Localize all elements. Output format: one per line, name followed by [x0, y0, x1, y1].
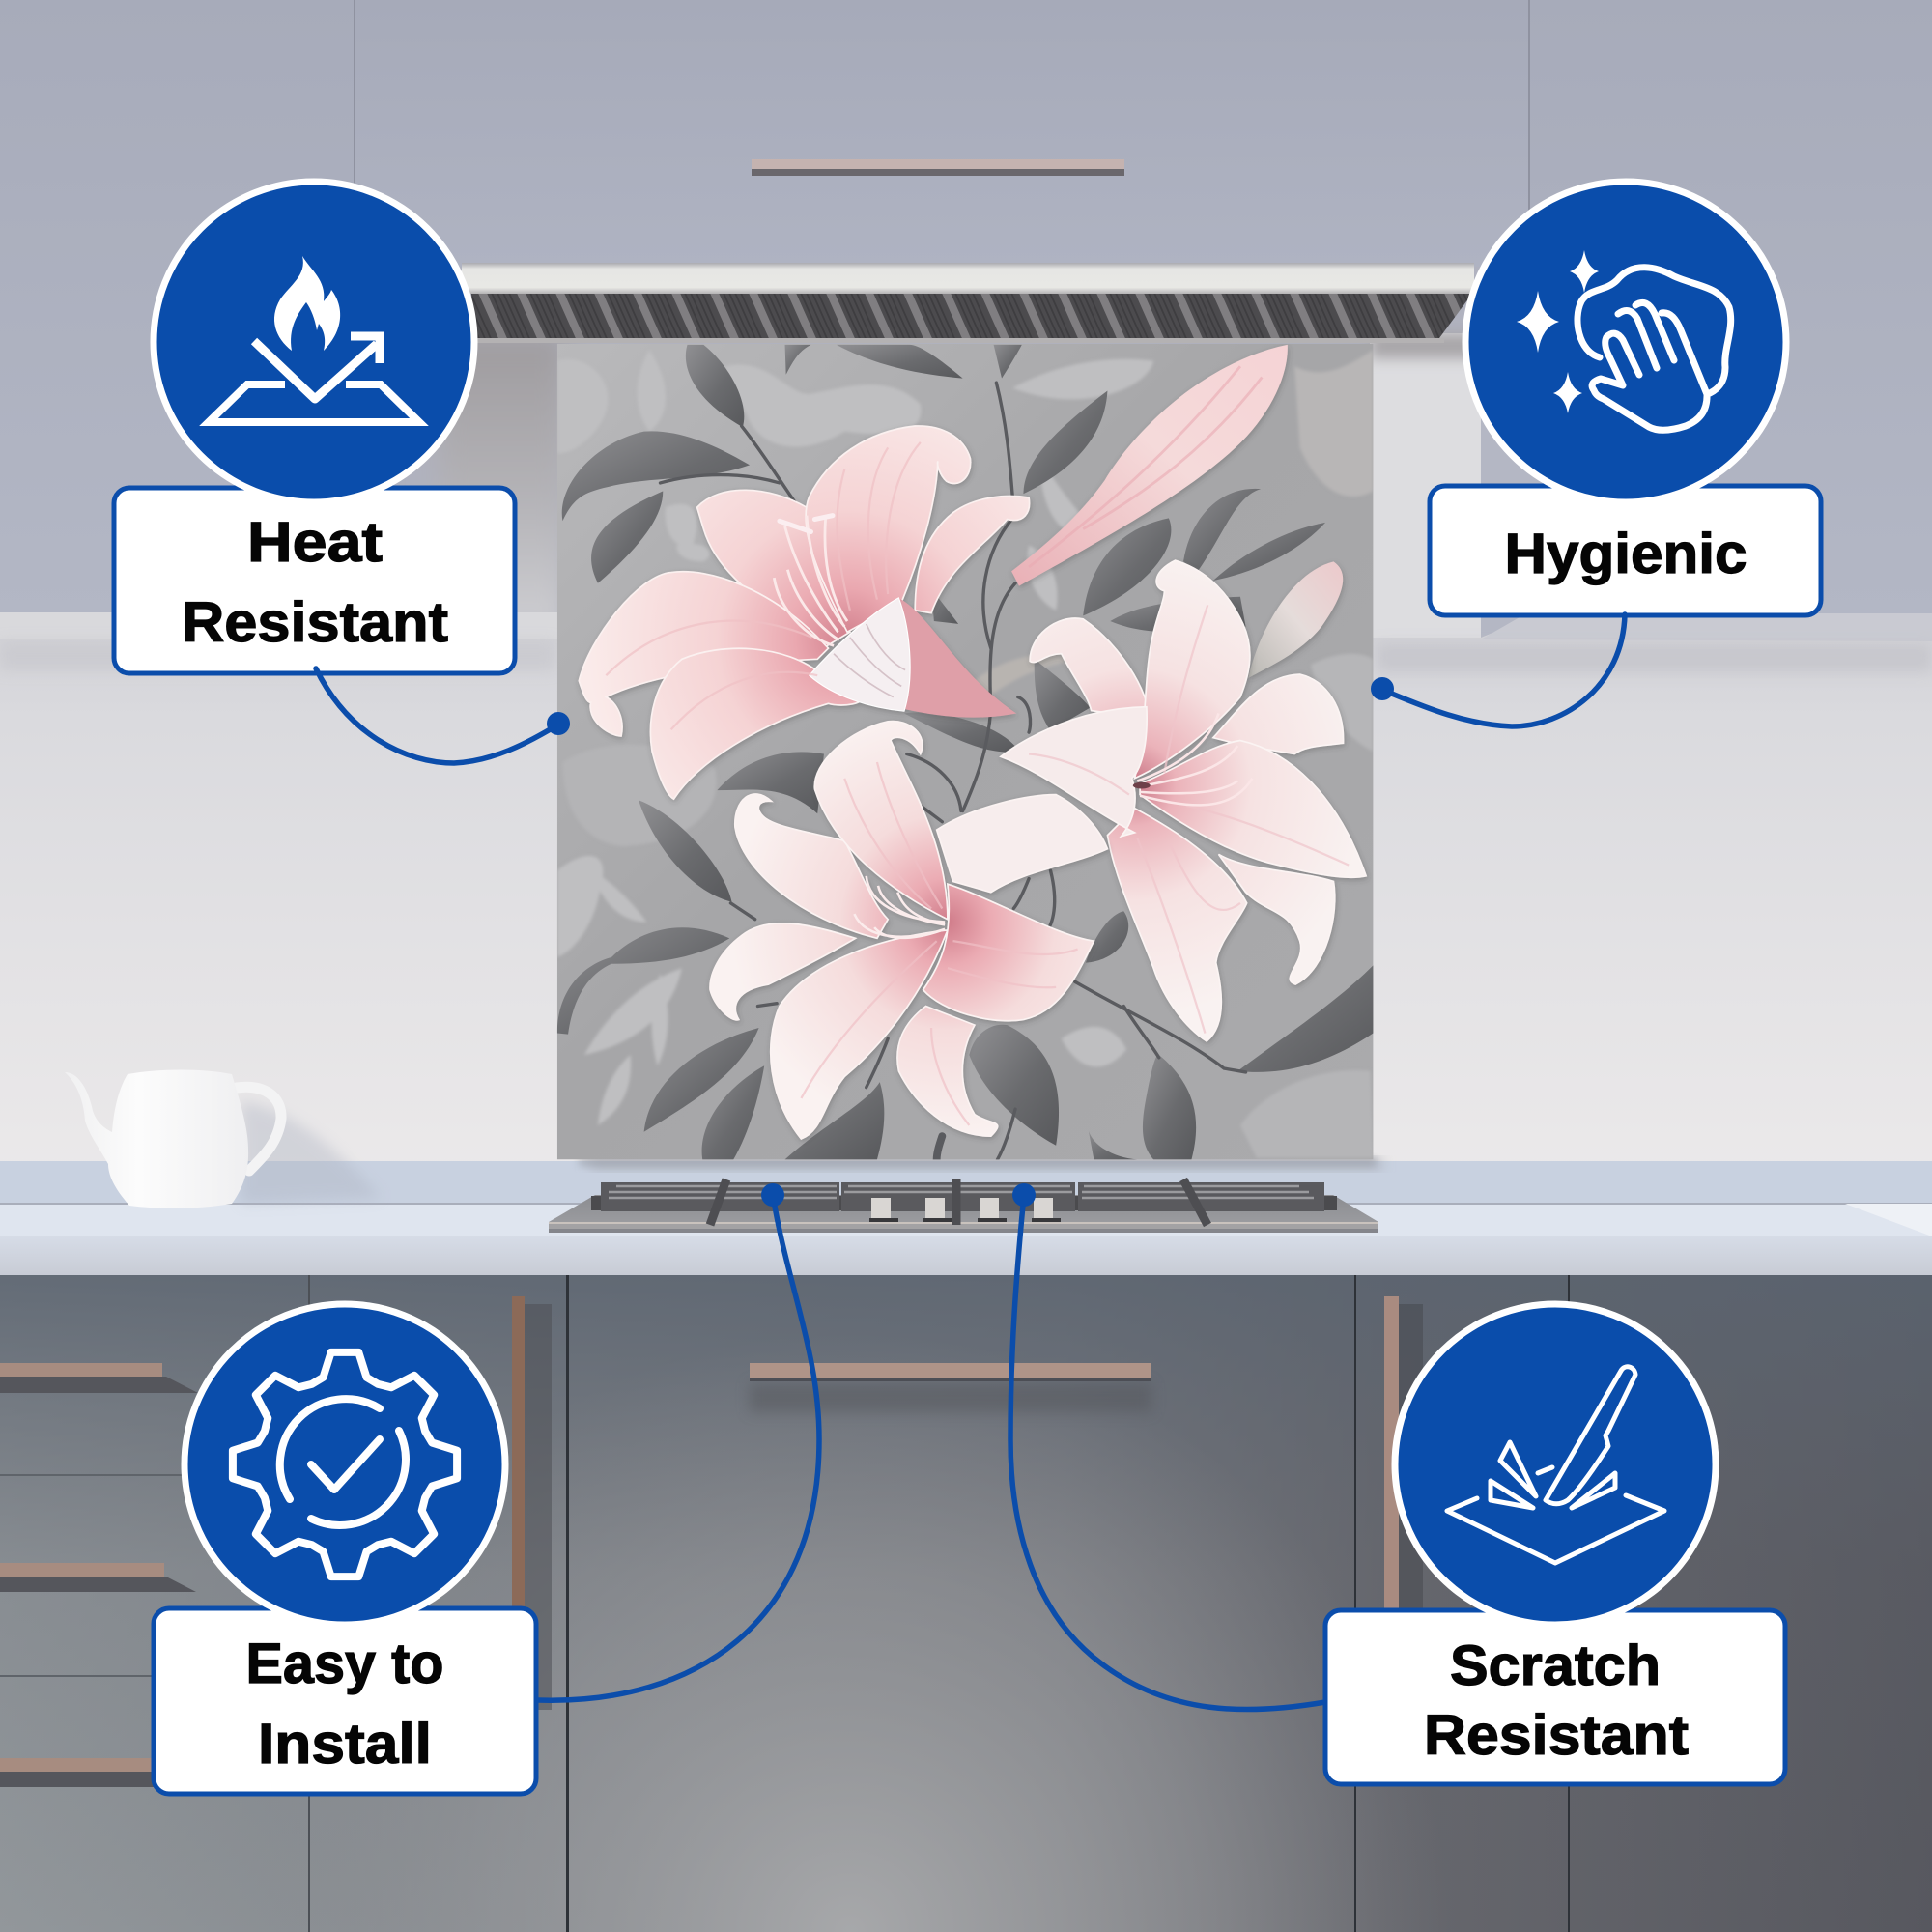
callout: Heat Resistant: [114, 182, 570, 763]
big lily bud: [1011, 345, 1288, 586]
jug shadow: [242, 1101, 367, 1200]
callout: Heat Resistant: Resistant: [182, 591, 448, 654]
icon: flame over arrow: [209, 256, 419, 422]
splashback panel: lily artwork: [557, 344, 1376, 1165]
panel background: [557, 344, 1373, 1159]
cabinet handles: [0, 1296, 1423, 1787]
panel shadow: [579, 1158, 1376, 1165]
lily flower right: [1001, 560, 1366, 1041]
label box: [1325, 1610, 1785, 1784]
icon: knife scratching surface: [1447, 1367, 1664, 1563]
anchor dot: [547, 712, 570, 735]
anchor dot: [761, 1183, 784, 1207]
stamens: [1137, 713, 1252, 805]
under-cabinet ledges: [0, 612, 1932, 672]
lily flower upper-left: [579, 426, 1030, 799]
wall: [0, 604, 1932, 1174]
label text: Scratch: [1450, 1634, 1661, 1697]
badge circle: [185, 1304, 505, 1625]
icon: gear with check: [233, 1352, 457, 1577]
control knobs: [869, 1198, 1061, 1221]
upper cabinets: [0, 0, 1932, 638]
anchor dot: [1371, 677, 1394, 700]
lower cabinets: [0, 1275, 1932, 1932]
connector line: [316, 668, 558, 763]
label box: [114, 488, 515, 673]
label text: Easy to: [245, 1633, 444, 1695]
jug: [65, 1070, 382, 1208]
callout: Scratch Resistant: [1010, 1183, 1785, 1784]
lily flower lower: [710, 722, 1107, 1139]
label box: [1430, 486, 1821, 615]
cooktop: [549, 1179, 1378, 1233]
label text: Hygienic: [1505, 523, 1747, 585]
label box: [154, 1608, 536, 1794]
connector line: [1010, 1195, 1325, 1710]
badge circle: [1395, 1304, 1716, 1625]
callout: Scratch Resistant: Resistant: [1424, 1704, 1689, 1767]
connector line: [1382, 614, 1625, 726]
extractor hood: [462, 263, 1474, 343]
badge circle: [1465, 182, 1786, 502]
pale background leaves: [557, 350, 1373, 1158]
callout: Easy to Install: [154, 1183, 819, 1794]
connector line: [538, 1195, 819, 1700]
stamens: [774, 516, 847, 645]
worktop: [0, 1160, 1932, 1275]
steel plate: [549, 1195, 1378, 1222]
stems: [660, 383, 1246, 1159]
anchor dot: [1012, 1183, 1036, 1207]
burner grates: [601, 1179, 1324, 1225]
dark leaves: [557, 345, 1373, 1159]
callout: Hygienic: [1371, 182, 1821, 726]
badge circle: [154, 182, 474, 502]
stamens: [854, 876, 945, 938]
callout: Easy to Install: Install: [258, 1713, 432, 1776]
icon: hand wiping with sparkles: [1517, 250, 1731, 430]
upper handle: [752, 159, 1124, 176]
small lily bud: [1248, 561, 1343, 678]
label text: Heat: [247, 511, 383, 574]
